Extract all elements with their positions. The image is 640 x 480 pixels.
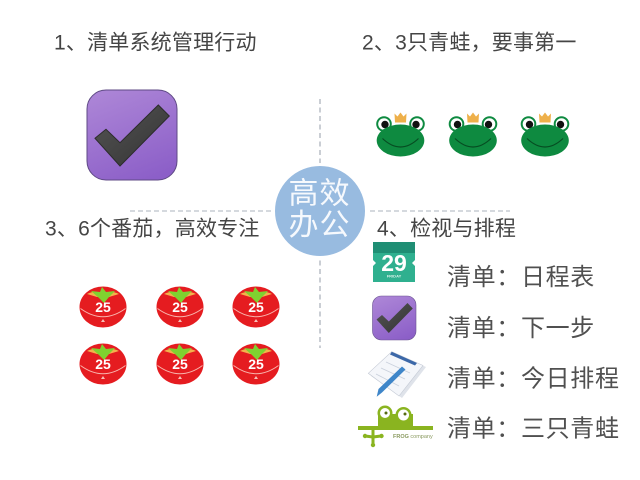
icon: large purple checkmark app	[87, 90, 177, 180]
tomato 5	[156, 344, 204, 384]
center circle: 高效办公: 办公	[288, 209, 350, 242]
icon: six tomato timers	[80, 286, 280, 384]
icon: frog company logo: FROG company	[393, 434, 433, 440]
vertical dashed divider	[319, 99, 321, 348]
list item 2 text: 下一步	[521, 315, 595, 342]
icon: frog 3	[521, 112, 569, 156]
heading 3: 3、6个番茄，高效专注	[45, 218, 260, 240]
icon: calendar 29: FRIDAY	[387, 274, 402, 278]
tomato 1	[80, 286, 126, 328]
icon: three frog princes	[376, 112, 569, 156]
list item 1 text: 清单：	[447, 264, 521, 291]
list item 2 text: 清单：	[447, 315, 521, 342]
tomato 2: 25	[172, 299, 188, 315]
list item 1 text: 日程表	[521, 264, 595, 291]
tomato 1: 25	[95, 299, 111, 315]
tomato 6: 25	[248, 356, 264, 372]
tomato 3	[232, 286, 280, 328]
icon: notepad and pen	[368, 352, 426, 398]
heading 1: 1、清单系统管理行动	[54, 32, 257, 54]
tomato 2	[156, 286, 204, 328]
tomato 5: 25	[172, 356, 188, 372]
list item 3 text: 今日排程	[521, 366, 620, 392]
center circle: 高效办公	[274, 164, 366, 258]
icon: calendar 29: 29	[381, 250, 407, 276]
heading 4: 4、检视与排程	[377, 218, 516, 240]
icon: small purple checkmark app	[372, 296, 416, 340]
list item 3 text: 清单：	[447, 366, 521, 392]
center circle: 高效办公: 高效	[288, 178, 350, 210]
list item 4 text: 三只青蛙	[521, 416, 620, 442]
tomato 3: 25	[248, 299, 264, 315]
tomato 4	[80, 344, 126, 384]
icon: calendar 29	[373, 242, 415, 282]
heading 2: 2、3只青蛙，要事第一	[362, 32, 577, 54]
horizontal dashed divider	[130, 210, 510, 212]
icon: frog 1	[376, 112, 425, 156]
icon: frog 2	[449, 112, 497, 156]
tomato 4: 25	[95, 356, 111, 372]
tomato 6	[232, 344, 280, 384]
list item 4 text: 清单：	[447, 416, 521, 442]
icon: frog company logo	[358, 406, 433, 447]
